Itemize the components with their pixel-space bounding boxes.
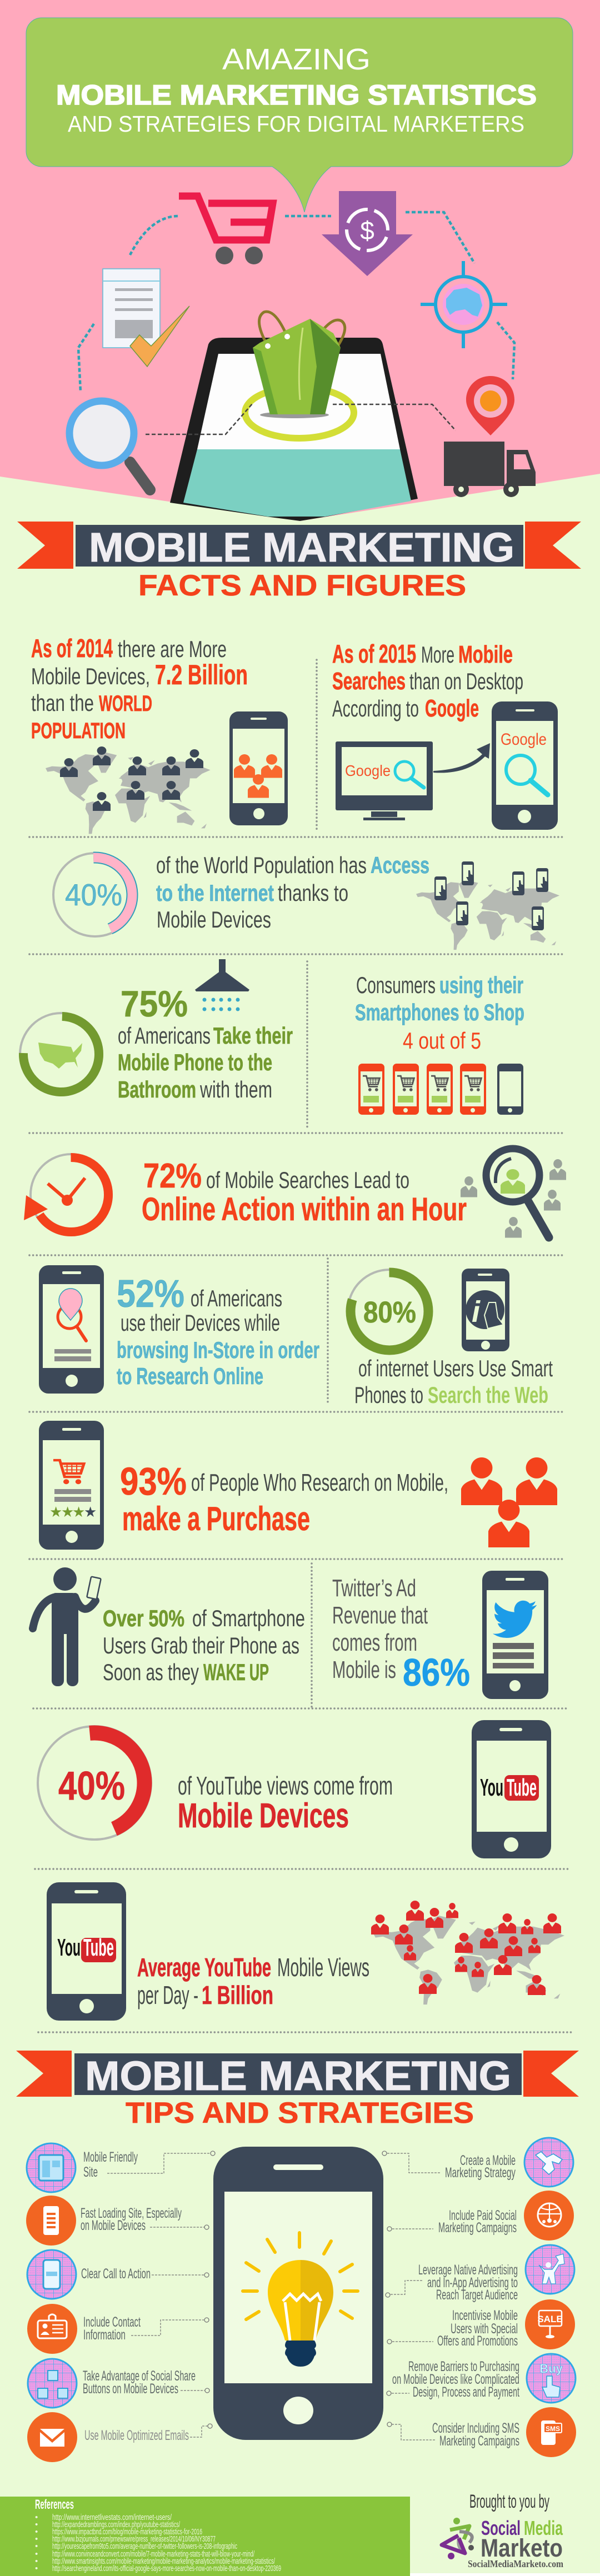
stat: mobile searches text: More <box>421 642 454 668</box>
stat: 72 percent text: of Mobile Searches Lead to <box>206 1167 409 1193</box>
stat: 93 percent text: 93% <box>120 1460 187 1503</box>
stat: twitter text: Mobile is <box>332 1656 396 1683</box>
banner sub-heading: FACTS AND FIGURES <box>138 569 466 602</box>
phone with cart and rating <box>39 1421 104 1550</box>
stat: 93 percent text: of People Who Research on Mobile, <box>191 1469 448 1496</box>
logo: Social Media Marketo: Media <box>524 2517 563 2539</box>
stat: 4 out of 5 text: Smartphones to Shop <box>355 999 524 1025</box>
references list: http://www.smartinsights.com/mobile-marketing/mobile-marketing-analytics/mobile-marketing-statistics/ <box>52 2557 275 2566</box>
icon: document with check mark <box>103 269 189 367</box>
stat: 7.2 billion devices text: Mobile Devices, <box>31 663 150 689</box>
phone with YouTube logo: You <box>480 1774 503 1801</box>
references list: http://www.convinceandconvert.com/mobile/7-mobile-marketing-stats-that-will-blow-your-mind/ <box>52 2549 254 2559</box>
horizontal divider <box>33 1707 567 1710</box>
stat: 7.2 billion devices text <box>31 634 248 743</box>
tip: mobile friendly site <box>27 2143 215 2192</box>
phone with Twitter bird <box>482 1571 548 1699</box>
stat: mobile searches text: As of 2015 <box>332 639 416 668</box>
references list: • <box>35 2557 38 2566</box>
stat: wake up text: of Smartphone <box>192 1605 305 1631</box>
stat: phone in bathroom text: with them <box>199 1076 272 1102</box>
desktop monitor with Google search <box>336 741 433 820</box>
stat: 93 percent text: make a Purchase <box>122 1500 310 1537</box>
tip: remove purchase barriers: Remove Barriers to Purchasing <box>408 2359 519 2374</box>
tip: remove purchase barriers: Buy <box>539 2362 563 2375</box>
icon: clock with arrow <box>24 1154 112 1235</box>
horizontal divider <box>29 1411 563 1413</box>
ring chart: 40 percent <box>53 853 137 936</box>
phone with info icon: i <box>472 1295 481 1329</box>
stat: YouTube daily views text: per Day - <box>137 1981 198 2009</box>
stat: mobile searches text: Mobile <box>458 641 513 668</box>
stat: mobile searches text: According to <box>332 695 419 721</box>
ring chart: 80 percent: 80% <box>363 1296 416 1329</box>
stat: YouTube daily views text: 1 Billion <box>202 1981 273 2009</box>
stat: internet access text: Access <box>371 852 429 878</box>
stat: mobile searches text: Searches <box>332 668 406 695</box>
stat: YouTube daily views text: Mobile Views <box>277 1953 369 1982</box>
tip: incentivise with offers: Users with Special <box>451 2321 518 2337</box>
stat: YouTube views text: of YouTube views come from <box>178 1771 393 1800</box>
tip: include paid social campaigns: Marketing Campaigns <box>438 2220 517 2236</box>
tip: fast loading site: Fast Loading Site, Especially <box>81 2206 182 2221</box>
bag handles <box>259 312 345 348</box>
tip: include contact information <box>27 2304 209 2354</box>
tip: native and in-app advertising <box>386 2245 574 2303</box>
references list: http://www.bizjournals.com/prnewswire/press_releases/2014/10/06/NY30877 <box>52 2534 216 2544</box>
tip: include paid social campaigns <box>387 2191 574 2241</box>
icon: map pin <box>466 376 514 435</box>
stat: wake up text <box>103 1605 305 1685</box>
phones: 4 of 5 shopping <box>358 1064 523 1115</box>
stat: mobile searches text: than on Desktop <box>409 668 523 694</box>
logo: Social Media Marketo: SocialMediaMarketo.com <box>468 2558 563 2569</box>
references list: • <box>35 2534 38 2544</box>
tip: create a mobile marketing strategy <box>382 2138 573 2187</box>
references list: • <box>35 2527 38 2537</box>
icon: man holding phone <box>33 1567 101 1686</box>
icon: shower head <box>195 959 249 1011</box>
tip: mobile friendly site: Site <box>83 2164 98 2180</box>
stat: twitter text: Revenue that <box>332 1602 428 1629</box>
light bulb rays <box>243 2233 358 2319</box>
phone with in-store search <box>39 1265 104 1394</box>
world map with red viewers <box>371 1901 564 2004</box>
references list: http://www.internetlivestats.com/internet-users/ <box>52 2513 172 2522</box>
horizontal divider <box>29 836 563 838</box>
stat: YouTube views text: Mobile Devices <box>178 1797 349 1835</box>
stat: phone in bathroom text <box>118 1023 293 1102</box>
light bulb base <box>285 2341 316 2367</box>
logo: Social Media Marketo: Marketo <box>481 2534 563 2562</box>
phone with orange people <box>229 711 288 825</box>
logo: Social Media Marketo: Social <box>481 2517 521 2539</box>
dashed connectors <box>146 403 253 434</box>
large phone with light bulb <box>213 2147 383 2440</box>
world map with phones <box>416 861 559 950</box>
phone with Google search: Google <box>501 730 547 749</box>
horizontal divider <box>29 1558 563 1560</box>
phone with info icon <box>462 1269 509 1351</box>
tip: native and in-app advertising: Leverage Native Advertising <box>418 2262 518 2278</box>
stat: internet access text: Mobile Devices <box>157 906 271 933</box>
vertical divider <box>311 1563 313 1708</box>
horizontal divider <box>38 2031 572 2033</box>
stat: 52 percent text <box>117 1272 319 1389</box>
title line 2: MOBILE MARKETING STATISTICS <box>56 79 537 111</box>
stat: mobile searches text <box>332 639 523 722</box>
tip: fast loading site: on Mobile Devices <box>81 2218 146 2233</box>
stat: 52 percent text: to Research Online <box>117 1363 263 1389</box>
ring chart: YouTube 40 percent: 40% <box>58 1764 125 1808</box>
tip: remove purchase barriers <box>387 2354 576 2403</box>
desktop monitor with Google search: Google <box>345 762 391 779</box>
stat: 80 percent text: Search the Web <box>428 1382 548 1408</box>
phone with YouTube logo: You <box>57 1934 81 1961</box>
dashed process route <box>78 212 514 392</box>
icon: globe target <box>421 261 507 348</box>
tip: incentivise with offers: SALE <box>537 2314 563 2324</box>
stat: 7.2 billion devices text: 7.2 Billion <box>155 659 248 690</box>
phone with YouTube logo: Tube <box>83 1934 114 1961</box>
banner heading: MOBILE MARKETING <box>85 2053 511 2099</box>
references list: https://www.impactbnd.com/blog/mobile-marketing-statistics-for-2016 <box>52 2527 202 2537</box>
vertical divider <box>306 961 308 1130</box>
ring under bag <box>245 387 354 438</box>
references list: http://yourescapefrom9to5.com/average-number-of-twitter-followers-is-208-infographic <box>52 2542 237 2551</box>
vertical divider <box>327 1259 329 1404</box>
phone with YouTube logo: Tube <box>507 1774 537 1801</box>
illustration: tablet with shopping bag <box>146 312 456 521</box>
stat: internet access text <box>156 852 429 933</box>
logo mark <box>442 2518 474 2559</box>
stat: internet access text: thanks to <box>278 880 348 906</box>
tip: social share buttons: Buttons on Mobile Devices <box>83 2381 178 2397</box>
references list: • <box>35 2564 38 2573</box>
stat: 80 percent text: Phones to <box>354 1382 423 1408</box>
stat: internet access text: to the Internet <box>156 880 274 906</box>
stat: wake up text: WAKE UP <box>203 1659 269 1685</box>
stat: YouTube daily views text: Average YouTube <box>137 1953 271 1982</box>
references panel <box>0 2497 410 2576</box>
bag body <box>253 319 341 414</box>
phone with cart and rating: ★ <box>61 1503 74 1520</box>
tip: social share buttons: Take Advantage of Social Share <box>83 2368 196 2384</box>
tip: consider SMS campaigns: Marketing Campaigns <box>439 2433 519 2449</box>
tip: clear call to action <box>27 2250 209 2299</box>
phone with cart and rating: ★ <box>84 1503 97 1520</box>
tip: include contact information: Information <box>83 2327 126 2343</box>
tip: clear call to action: Clear Call to Action <box>81 2266 151 2282</box>
stat: 52 percent text: of Americans <box>191 1285 282 1311</box>
stat: phone in bathroom text: Take their <box>213 1023 293 1049</box>
world map with people <box>46 746 211 834</box>
tip: consider SMS campaigns: SMS <box>546 2425 560 2433</box>
icon: purple dollar arrow: $ <box>360 216 374 245</box>
stat: twitter text: Twitter’s Ad <box>332 1575 416 1602</box>
stat: 52 percent text: browsing In-Store in order <box>117 1337 319 1363</box>
stat: twitter text: comes from <box>332 1629 417 1656</box>
stat: internet access text: of the World Population has <box>156 852 367 878</box>
stat: wake up text: Soon as they <box>103 1659 199 1685</box>
stat: 7.2 billion devices text: there are More <box>118 636 227 662</box>
stat: 7.2 billion devices text: WORLD <box>99 691 152 716</box>
stat: mobile searches text: Google <box>425 695 479 722</box>
references list: • <box>35 2513 38 2522</box>
stat: 4 out of 5 text: Consumers <box>356 972 436 998</box>
stat: 72 percent text: 72% <box>143 1157 202 1195</box>
tip: create a mobile marketing strategy: Create a Mobile <box>460 2153 516 2168</box>
stat: 52 percent text: use their Devices while <box>121 1310 280 1336</box>
stat: 7.2 billion devices text: POPULATION <box>31 719 126 743</box>
stat: phone in bathroom text: of Americans <box>118 1023 211 1049</box>
stat: wake up text: Over 50% <box>103 1605 184 1631</box>
references list: http://expandedramblings.com/index.php/youtube-statistics/ <box>52 2520 180 2529</box>
tip: incentivise with offers <box>387 2299 575 2349</box>
stat: 4 out of 5 text <box>355 972 524 1054</box>
title line 1: AMAZING <box>222 43 371 76</box>
icon: magnifier <box>69 401 150 490</box>
stat: 75 percent: 75% <box>121 983 188 1024</box>
tip: fast loading site <box>26 2196 209 2246</box>
icon: magnifier over people <box>461 1149 566 1237</box>
horizontal divider <box>29 1132 563 1134</box>
stat: twitter text: 86% <box>403 1651 470 1694</box>
stat: phone in bathroom text: Bathroom <box>118 1076 196 1102</box>
phone with YouTube logo <box>472 1720 551 1858</box>
tip: remove purchase barriers: Design, Process and Payment <box>413 2384 519 2400</box>
stat: YouTube daily views text <box>137 1953 369 2009</box>
tip: include contact information: Include Contact <box>83 2314 141 2330</box>
phone with cart and rating: ★ <box>49 1503 62 1520</box>
tip: native and in-app advertising: and In-App Advertising to <box>427 2275 518 2291</box>
title line 3: AND STRATEGIES FOR DIGITAL MARKETERS <box>68 111 524 137</box>
stat: twitter text <box>332 1575 470 1694</box>
tip: consider SMS campaigns: Consider Including SMS <box>432 2420 519 2436</box>
tip: mobile friendly site: Mobile Friendly <box>83 2149 138 2165</box>
icon: shopping cart <box>179 196 273 264</box>
tip: native and in-app advertising: Reach Target Audience <box>436 2287 518 2303</box>
banner: mobile marketing tips <box>16 2051 579 2129</box>
horizontal divider <box>29 1254 563 1256</box>
icon: purple dollar arrow <box>322 191 413 276</box>
arrow: desktop to mobile <box>433 743 490 773</box>
references list: • <box>35 2549 38 2559</box>
vertical divider <box>316 660 318 830</box>
stat: 93 percent text <box>120 1460 448 1537</box>
logo: Social Media Marketo <box>442 2517 563 2569</box>
ring chart: 80 percent <box>348 1270 431 1353</box>
stat: wake up text: Users Grab their Phone as <box>103 1632 299 1658</box>
phone with cart and rating: ★ <box>72 1503 85 1520</box>
stat: 4 out of 5 text: using their <box>439 972 523 998</box>
tip: include paid social campaigns: Include Paid Social <box>449 2208 517 2223</box>
stat: YouTube views text <box>178 1771 393 1835</box>
stat: 72 percent text: Online Action within an Hour <box>142 1191 467 1227</box>
tip: consider SMS campaigns <box>387 2407 576 2457</box>
ring chart: 40 percent: 40% <box>65 878 122 912</box>
stat: 72 percent text <box>142 1157 467 1227</box>
bottom edge strip <box>410 2573 600 2576</box>
ring chart: YouTube 40 percent <box>38 1726 151 1840</box>
icon: three red people <box>461 1457 557 1547</box>
pink header background <box>0 0 600 521</box>
phone with Google search <box>492 701 558 830</box>
tip: social share buttons <box>28 2359 209 2408</box>
references list <box>35 2513 281 2573</box>
banner heading: MOBILE MARKETING <box>89 524 514 570</box>
tip: mobile optimized emails <box>27 2412 212 2462</box>
light bulb glass <box>268 2260 301 2341</box>
ring chart: 75 percent USA <box>20 1013 102 1095</box>
title speech bubble <box>26 18 573 212</box>
tip: incentivise with offers: Incentivise Mobile <box>452 2308 518 2323</box>
references heading: References <box>35 2497 74 2512</box>
phone with YouTube logo <box>47 1882 126 2021</box>
stat: 4 out of 5 text: 4 out of 5 <box>403 1028 481 1054</box>
stat: 52 percent text: 52% <box>117 1272 184 1315</box>
banner sub-heading: TIPS AND STRATEGIES <box>126 2097 474 2129</box>
references list: http://searchengineland.com/its-official-google-says-more-searches-now-on-mobile-than-on-desktop-220369 <box>52 2564 281 2573</box>
horizontal divider <box>29 953 563 955</box>
horizontal divider <box>35 1868 569 1870</box>
tip: incentivise with offers: Offers and Promotions <box>437 2333 518 2349</box>
stat: 7.2 billion devices text: than the <box>31 690 94 716</box>
references list: • <box>35 2542 38 2551</box>
tip: create a mobile marketing strategy: Marketing Strategy <box>445 2165 516 2181</box>
tip: mobile optimized emails: Use Mobile Optimized Emails <box>84 2428 189 2443</box>
references list: • <box>35 2520 38 2529</box>
stat: 7.2 billion devices text: As of 2014 <box>31 634 113 663</box>
stat: phone in bathroom text: Mobile Phone to the <box>118 1049 272 1075</box>
icon: delivery truck <box>444 442 536 497</box>
banner: mobile marketing facts <box>17 522 581 602</box>
stat: 80 percent text <box>354 1355 553 1408</box>
